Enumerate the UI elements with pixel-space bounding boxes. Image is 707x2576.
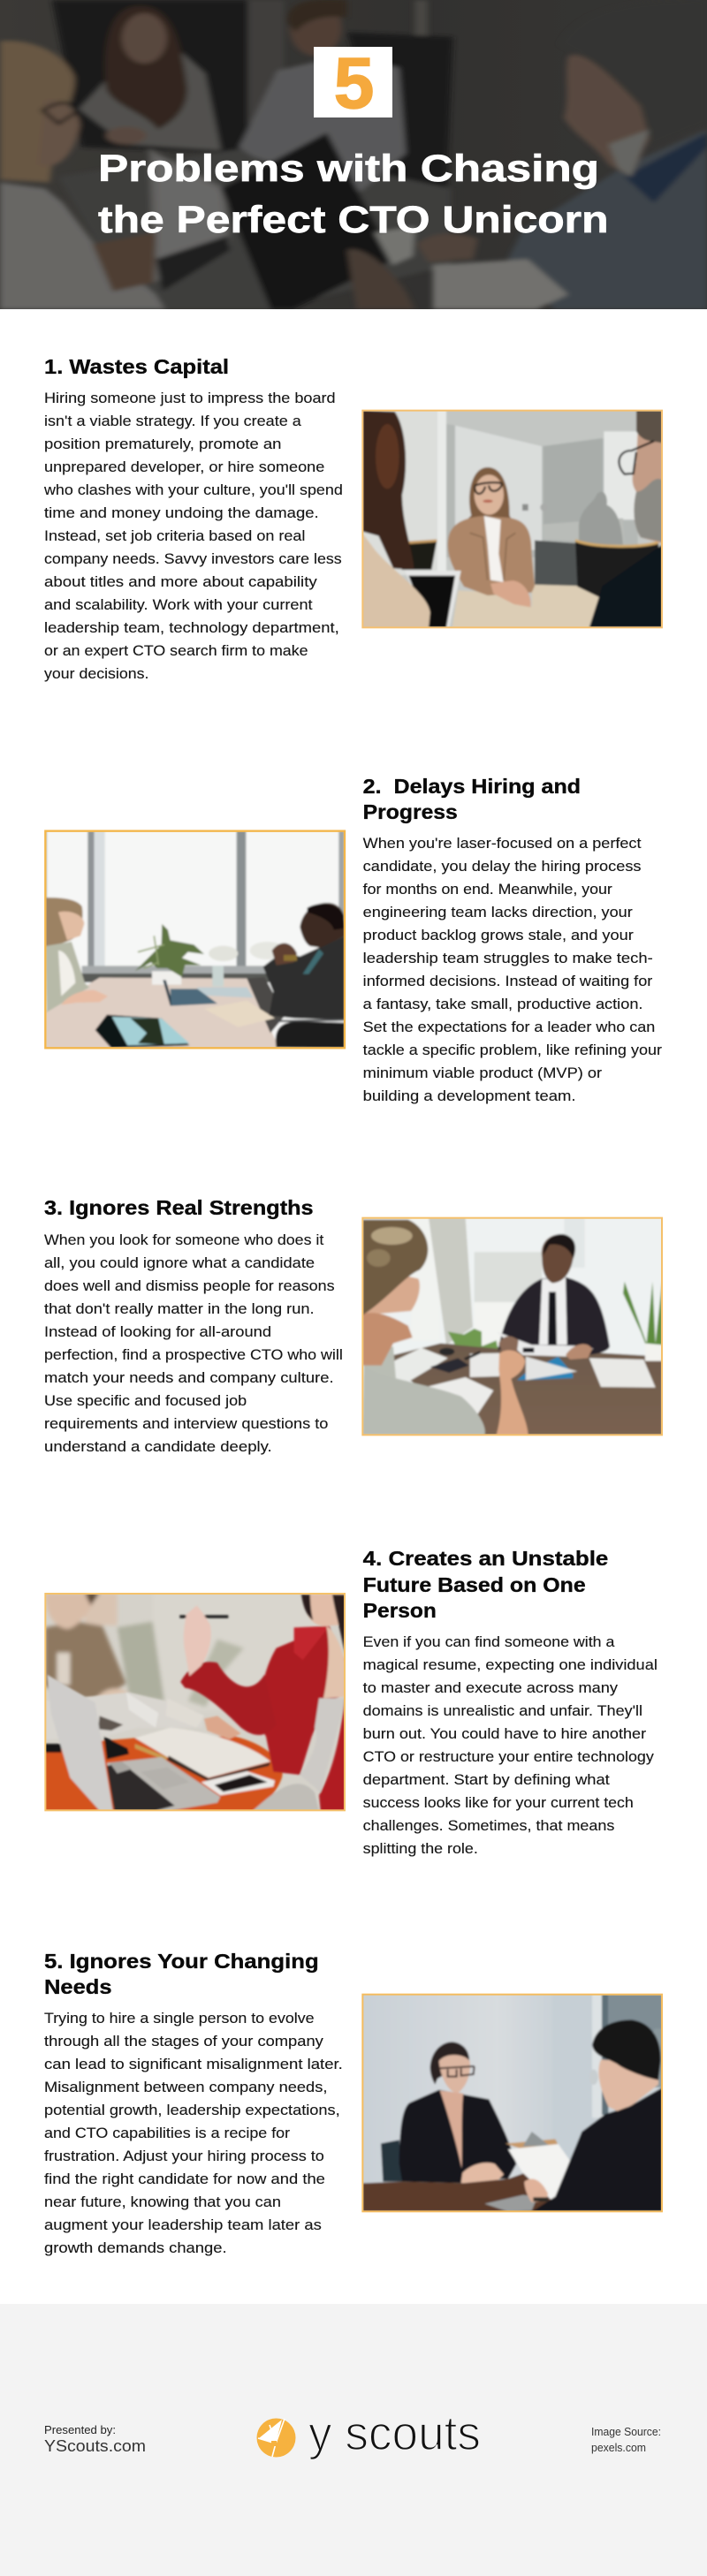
body text 4: to master and execute across many bbox=[363, 1680, 619, 1696]
body text 2: product backlog grows stale, and your bbox=[363, 928, 634, 943]
body text 3: perfection, find a prospective CTO who will bbox=[44, 1347, 343, 1363]
body text 3 bbox=[44, 1232, 343, 1455]
body text 4 bbox=[363, 1634, 658, 1857]
body text 1: isn't a viable strategy. If you create a bbox=[44, 413, 302, 429]
body text 3: When you look for someone who does it bbox=[44, 1232, 324, 1248]
body text 1: your decisions. bbox=[44, 666, 148, 682]
body text 2: candidate, you delay the hiring process bbox=[363, 859, 642, 875]
body text 4: CTO or restructure your entire technology bbox=[363, 1749, 655, 1765]
body text 3: that don't really matter in the long run. bbox=[44, 1301, 315, 1317]
body text 5: Misalignment between company needs, bbox=[44, 2080, 327, 2095]
heading 4: 4. Creates an Unstable bbox=[363, 1547, 608, 1570]
presented by: YScouts.com bbox=[44, 2436, 146, 2455]
icon: y scouts compass mark bbox=[256, 2419, 295, 2458]
body text 5: can lead to significant misalignment later. bbox=[44, 2057, 343, 2072]
body text 1: Hiring someone just to impress the board bbox=[44, 390, 336, 406]
body text 2: Set the expectations for a leader who can bbox=[363, 1019, 655, 1035]
logo bbox=[256, 2406, 481, 2460]
number badge bbox=[314, 43, 392, 124]
body text 2: minimum viable product (MVP) or bbox=[363, 1065, 603, 1081]
body text 4: burn out. You could have to hire another bbox=[363, 1726, 647, 1742]
title: Problems with Chasing bbox=[98, 148, 599, 190]
body text 2: When you're laser-focused on a perfect bbox=[363, 836, 642, 852]
body text 1: who clashes with your culture, you'll spend bbox=[43, 482, 343, 498]
body text 2: leadership team struggles to make tech- bbox=[363, 951, 653, 966]
body text 3: Use specific and focused job bbox=[44, 1393, 247, 1409]
presented by bbox=[44, 2423, 146, 2455]
body text 1 bbox=[43, 390, 343, 682]
body text 1: or an expert CTO search firm to make bbox=[44, 643, 308, 659]
heading 2: 2. Delays Hiring and bbox=[363, 775, 581, 798]
heading 4: Person bbox=[363, 1599, 437, 1622]
body text 1: and scalability. Work with your current bbox=[44, 597, 313, 613]
body text 5: growth demands change. bbox=[44, 2240, 227, 2256]
body text 1: Instead, set job criteria based on real bbox=[44, 528, 305, 544]
title bbox=[98, 148, 608, 241]
body text 2: a fantasy, take small, productive action. bbox=[363, 996, 643, 1012]
number badge: 5 bbox=[334, 43, 374, 124]
body text 1: company needs. Savvy investors care less bbox=[44, 551, 342, 567]
section 2: delays hiring and progress bbox=[41, 775, 663, 1104]
body text 1: time and money undoing the damage. bbox=[44, 505, 319, 521]
body text 3: match your needs and company culture. bbox=[44, 1370, 334, 1386]
wordmark: y scouts bbox=[308, 2406, 481, 2460]
section 1: wastes capital bbox=[43, 355, 667, 682]
body text 2: building a development team. bbox=[363, 1088, 576, 1104]
body text 5: find the right candidate for now and the bbox=[44, 2171, 325, 2187]
body text 4: Even if you can find someone with a bbox=[363, 1634, 615, 1650]
body text 5: potential growth, leadership expectations, bbox=[44, 2102, 340, 2118]
body text 2: tackle a specific problem, like refining your bbox=[363, 1042, 663, 1058]
body text 5: and CTO capabilities is a recipe for bbox=[44, 2125, 291, 2141]
body text 4: magical resume, expecting one individual bbox=[363, 1657, 658, 1673]
body text 5: near future, knowing that you can bbox=[44, 2194, 281, 2210]
heading 3: 3. Ignores Real Strengths bbox=[44, 1196, 314, 1219]
image source: Image Source: bbox=[591, 2425, 661, 2438]
body text 3: Instead of looking for all-around bbox=[44, 1324, 271, 1340]
body text 5 bbox=[44, 2011, 343, 2256]
body text 4: domains is unrealistic and unfair. They'll bbox=[363, 1703, 642, 1719]
photo 1: candidate interview with woman in tan blazer bbox=[358, 406, 667, 633]
heading 5: Needs bbox=[44, 1975, 111, 1998]
heading 5: 5. Ignores Your Changing bbox=[44, 1950, 319, 1973]
footer bbox=[0, 2304, 707, 2576]
body text 4: challenges. Sometimes, that means bbox=[363, 1818, 614, 1834]
title: the Perfect CTO Unicorn bbox=[98, 200, 608, 241]
heading 5 bbox=[44, 1950, 319, 1998]
body text 1: unprepared developer, or hire someone bbox=[44, 459, 324, 475]
body text 1: about titles and more about capability bbox=[44, 574, 318, 590]
body text 5: through all the stages of your company bbox=[44, 2034, 324, 2049]
body text 1: position prematurely, promote an bbox=[44, 436, 281, 452]
hero banner bbox=[0, 0, 707, 309]
body text 5: frustration. Adjust your hiring process to bbox=[44, 2148, 324, 2164]
heading 4: Future Based on One bbox=[363, 1573, 586, 1596]
photo 3: man in suit reviewing papers bbox=[358, 1214, 667, 1440]
body text 2: informed decisions. Instead of waiting for bbox=[363, 974, 653, 989]
section 4: creates an unstable future bbox=[41, 1547, 658, 1857]
body text 4: department. Start by defining what bbox=[363, 1772, 610, 1788]
heading 2: Progress bbox=[363, 800, 458, 823]
heading 2 bbox=[363, 775, 581, 823]
body text 4: splitting the role. bbox=[363, 1841, 478, 1857]
body text 3: understand a candidate deeply. bbox=[44, 1439, 272, 1455]
body text 4: success looks like for your current tech bbox=[363, 1795, 634, 1811]
body text 2 bbox=[363, 836, 663, 1104]
section 5: ignores your changing needs bbox=[44, 1950, 667, 2256]
body text 3: does well and dismiss people for reasons bbox=[44, 1278, 335, 1294]
body text 1: leadership team, technology department, bbox=[44, 620, 339, 636]
body text 2: for months on end. Meanwhile, your bbox=[363, 882, 612, 898]
hero photo: darkened meeting bbox=[0, 0, 707, 309]
presented by: Presented by: bbox=[44, 2423, 116, 2436]
body text 2: engineering team lacks direction, your bbox=[363, 905, 633, 921]
body text 5: augment your leadership team later as bbox=[44, 2217, 322, 2233]
section 3: ignores real strengths bbox=[44, 1196, 667, 1455]
photo 4: laptop and woman in red blazer bbox=[41, 1589, 350, 1815]
body text 3: all, you could ignore what a candidate bbox=[44, 1255, 315, 1271]
image source: pexels.com bbox=[591, 2441, 646, 2454]
body text 5: Trying to hire a single person to evolve bbox=[44, 2011, 315, 2027]
heading 4 bbox=[363, 1547, 608, 1622]
photo 2: meeting at a window table bbox=[41, 827, 350, 1053]
photo 5: woman in black blazer interviewed across a table bbox=[358, 1990, 667, 2216]
image source bbox=[591, 2425, 661, 2454]
body text 3: requirements and interview questions to bbox=[44, 1416, 328, 1432]
heading 1: 1. Wastes Capital bbox=[44, 355, 229, 378]
